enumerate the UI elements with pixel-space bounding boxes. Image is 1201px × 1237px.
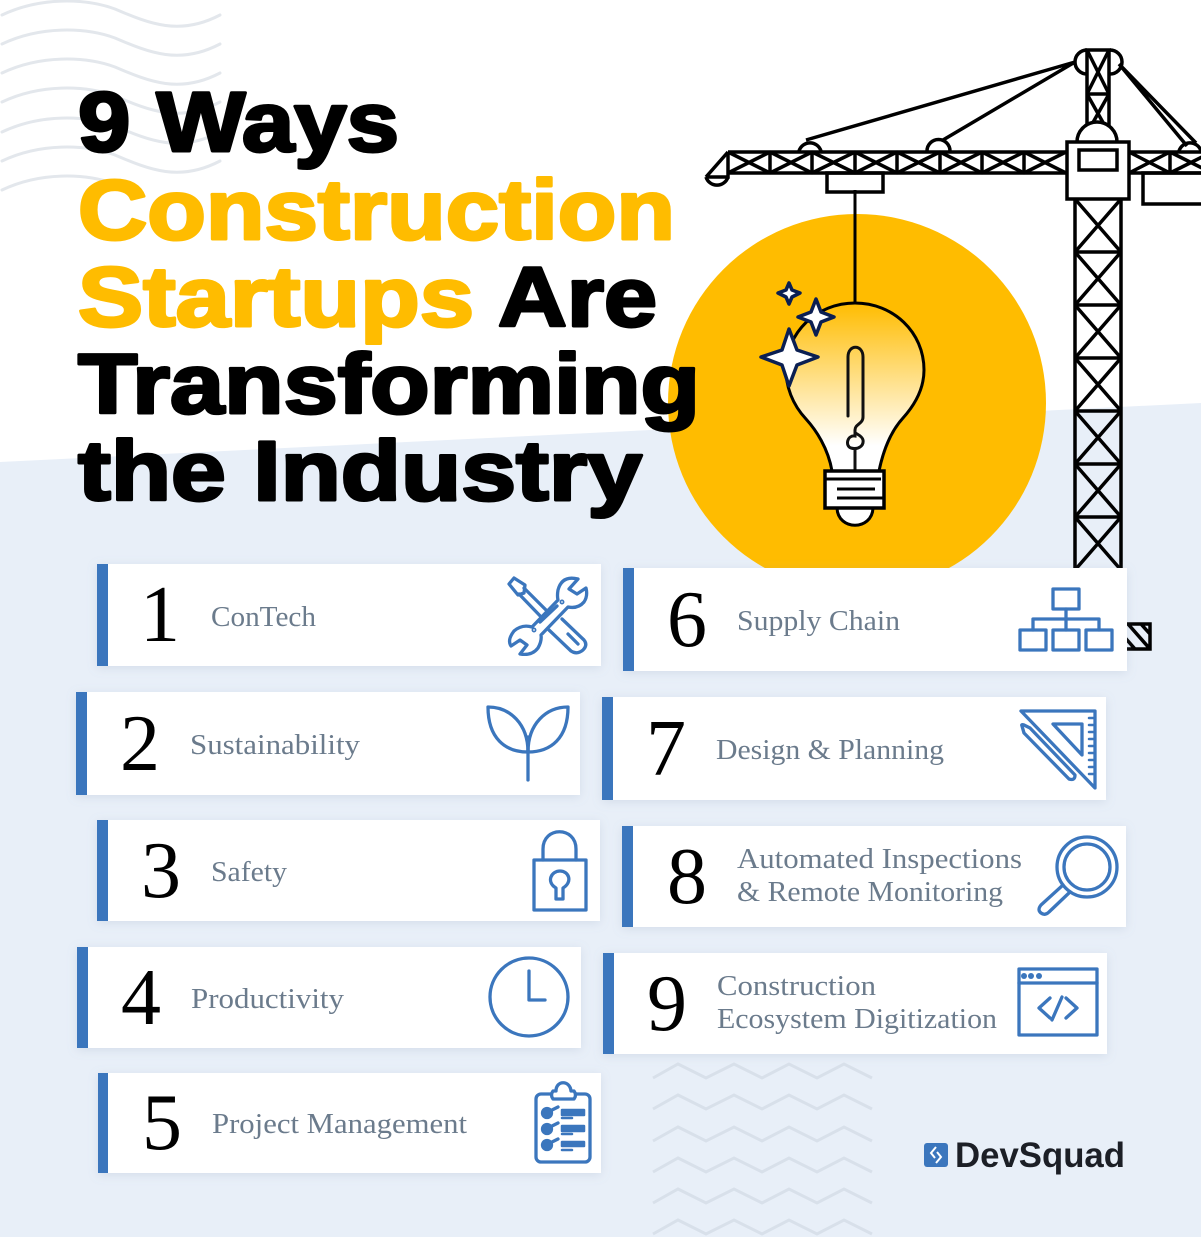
card 4: Productivity: Productivity <box>191 983 345 1015</box>
card 8: Automated Inspections & Remote Monitoring: 8 <box>667 833 707 921</box>
lightbulb <box>761 190 924 525</box>
logo wordmark: DevSquad <box>955 1136 1125 1175</box>
card 8: Automated Inspections & Remote Monitoring: Automated Inspections <box>737 843 1022 875</box>
title: 9 Ways <box>78 75 399 169</box>
card 9: Construction Ecosystem Digitization: Ecosystem Digitization <box>717 1003 998 1035</box>
card 4: Productivity <box>77 947 581 1048</box>
icon: padlock <box>534 832 586 910</box>
card 2: Sustainability <box>76 692 580 795</box>
card 1: ConTech <box>97 564 601 666</box>
crane cables and pulleys <box>799 50 1201 151</box>
bulb base <box>825 471 884 508</box>
card 4: Productivity: 4 <box>121 954 161 1042</box>
card 6: Supply Chain <box>623 568 1127 671</box>
card 7: Design & Planning <box>602 697 1106 800</box>
card 1: ConTech: ConTech <box>211 601 316 633</box>
icon: code window <box>1019 969 1097 1035</box>
crane hook box and counterweight <box>827 173 1201 204</box>
title: Startups <box>78 250 474 344</box>
title <box>78 75 700 518</box>
card 9: Construction Ecosystem Digitization <box>603 953 1107 1054</box>
card 9: Construction Ecosystem Digitization: Construction <box>717 970 877 1002</box>
bulb glass <box>786 303 924 471</box>
decorative zigzag pattern bottom <box>653 1064 872 1234</box>
yellow circle <box>668 214 1046 592</box>
icon: set square and pencil <box>1021 711 1095 788</box>
title: Construction <box>78 163 675 257</box>
card 5: Project Management: Project Management <box>212 1108 467 1140</box>
card 2: Sustainability: Sustainability <box>190 729 361 761</box>
card 9: Construction Ecosystem Digitization: 9 <box>647 960 687 1048</box>
title: the Industry <box>78 424 642 518</box>
icon: clipboard checklist <box>536 1083 590 1162</box>
crane cab <box>1067 122 1129 199</box>
card 3: Safety: Safety <box>211 856 288 888</box>
title: Transforming <box>78 337 700 431</box>
icon: org chart <box>1020 589 1112 650</box>
card 8: Automated Inspections & Remote Monitoring: & Remote Monitoring <box>737 876 1003 908</box>
card 3: Safety <box>97 820 600 921</box>
title: Are <box>498 250 657 344</box>
crane top mast <box>1085 50 1111 128</box>
card 3: Safety: 3 <box>141 827 181 915</box>
card 8: Automated Inspections & Remote Monitoring <box>622 826 1126 927</box>
DevSquad logo <box>924 1136 1125 1175</box>
crane mast foot <box>1120 624 1150 649</box>
card 5: Project Management <box>98 1073 601 1173</box>
card 1: ConTech: 1 <box>140 571 180 659</box>
icon: magnifier <box>1039 837 1117 914</box>
card 7: Design & Planning: Design & Planning <box>716 734 944 766</box>
crane <box>706 50 1201 649</box>
sparkle stars <box>761 283 834 386</box>
decorative wave pattern top left <box>2 1 220 190</box>
filament <box>848 347 863 471</box>
logo mark <box>924 1143 948 1167</box>
icon: wrench and screwdriver <box>509 578 587 654</box>
icon: plant <box>488 707 568 780</box>
card 6: Supply Chain: 6 <box>667 576 707 664</box>
crane boom <box>706 152 1201 185</box>
bulb tip <box>837 508 873 525</box>
card 6: Supply Chain: Supply Chain <box>737 605 901 637</box>
icon: clock <box>490 958 568 1036</box>
bulb cable <box>854 190 856 303</box>
card 5: Project Management: 5 <box>142 1079 182 1167</box>
crane mast tower <box>1075 199 1121 570</box>
card 2: Sustainability: 2 <box>120 700 160 788</box>
card 7: Design & Planning: 7 <box>646 705 686 793</box>
background: light blue slanted panel <box>0 403 1201 1237</box>
